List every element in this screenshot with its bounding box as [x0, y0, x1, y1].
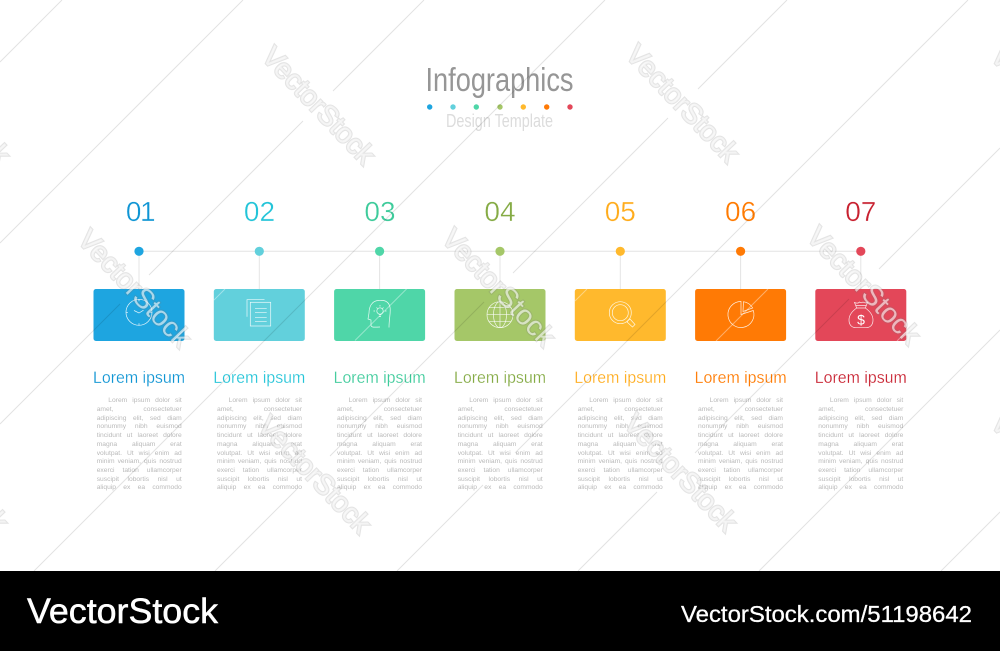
body text 01: nonummy nibh euismod — [97, 423, 182, 430]
body text 02: minim veniam, quis nostrud — [217, 458, 302, 465]
body text 01: tincidunt ut laoreet dolore — [97, 432, 182, 439]
card 03 — [334, 289, 425, 341]
body text 04: amet, consectetuer — [458, 406, 543, 413]
body text 07: tincidunt ut laoreet dolore — [818, 432, 903, 439]
footer band — [0, 571, 1000, 651]
title: Infographics — [426, 61, 574, 98]
panel: step 03 — [334, 196, 427, 497]
timeline line — [139, 250, 860, 252]
body text 03: magna aliquam erat — [337, 441, 422, 448]
panel: step 05 — [574, 196, 668, 497]
number 05: 05 — [605, 196, 636, 227]
heading 07: Lorem ipsum — [815, 369, 907, 387]
icon: clock — [126, 299, 152, 325]
node and connector 02 — [255, 247, 264, 289]
watermark: repeated VectorStock marks: VectorStock — [436, 222, 562, 353]
body text 06 — [698, 397, 788, 497]
body text 07: minim veniam, quis nostrud — [818, 458, 903, 465]
body text 02: volutpat. Ut wisi enim ad — [217, 450, 302, 456]
body text 05: Lorem ipsum dolor sit — [589, 397, 663, 404]
watermark: repeated VectorStock marks: VectorStock — [72, 223, 198, 354]
body text 02: tincidunt ut laoreet dolore — [217, 432, 302, 439]
body text 01 — [97, 397, 187, 497]
card 01 — [94, 289, 184, 341]
body text 03: minim veniam, quis nostrud — [337, 458, 422, 465]
body text 04: adipiscing elit, sed diam — [458, 415, 543, 422]
footer image id: VectorStock.com/51198642 — [681, 601, 972, 627]
panel: step 07 — [815, 196, 908, 497]
body text 07: exerci tation ullamcorper — [818, 467, 903, 474]
heading 03: Lorem ipsum — [334, 369, 426, 387]
body text 04: exerci tation ullamcorper — [458, 467, 543, 474]
body text 01: minim veniam, quis nostrud — [97, 458, 182, 465]
body text 07: suscipit lobortis nisl ut — [818, 476, 903, 483]
watermark: repeated VectorStock marks: VectorStock — [252, 409, 378, 540]
body text 04: nonummy nibh euismod — [458, 423, 543, 430]
body text 01: aliquip ex ea commodo — [97, 484, 182, 491]
body text 06: minim veniam, quis nostrud — [698, 458, 783, 465]
heading 02: Lorem ipsum — [213, 369, 305, 387]
body text 04: suscipit lobortis nisl ut — [458, 476, 543, 483]
body text 05: adipiscing elit, sed diam — [578, 415, 663, 422]
number 03: 03 — [364, 196, 396, 227]
body text 05: suscipit lobortis nisl ut — [578, 476, 663, 483]
body text 05: exerci tation ullamcorper — [578, 467, 663, 474]
card 04 — [454, 289, 546, 341]
body text 06: tincidunt ut laoreet dolore — [698, 432, 783, 439]
body text 02: amet, consectetuer — [217, 406, 302, 413]
body text 02: suscipit lobortis nisl ut — [217, 476, 302, 483]
body text 02 — [217, 397, 307, 497]
body text 01: amet, consectetuer — [97, 406, 182, 413]
body text 03: tincidunt ut laoreet dolore — [337, 432, 422, 439]
watermark: repeated VectorStock marks — [0, 38, 1000, 540]
body text 06: suscipit lobortis nisl ut — [698, 476, 783, 483]
icon: globe — [487, 302, 513, 328]
icon: documents — [247, 300, 271, 326]
body text 04: minim veniam, quis nostrud — [458, 458, 543, 465]
body text 05: nonummy nibh euismod — [578, 423, 663, 430]
panel: step 06 — [695, 196, 788, 497]
icon: money bag: $ — [857, 312, 865, 328]
node and connector 06 — [736, 247, 745, 289]
body text 04: magna aliquam erat — [458, 441, 543, 448]
body text 07: aliquip ex ea commodo — [818, 484, 903, 491]
heading 06: Lorem ipsum — [695, 369, 787, 387]
number 07: 07 — [845, 196, 876, 227]
body text 05: magna aliquam erat — [578, 441, 663, 448]
body text 05: amet, consectetuer — [578, 406, 663, 413]
body text 04: tincidunt ut laoreet dolore — [458, 432, 543, 439]
watermark: repeated VectorStock marks: VectorStock — [256, 40, 382, 171]
number 06: 06 — [725, 196, 756, 227]
body text 05: volutpat. Ut wisi enim ad — [578, 450, 663, 456]
icon: head with lightbulb — [368, 300, 390, 328]
body text 05: minim veniam, quis nostrud — [578, 458, 663, 465]
body text 06: adipiscing elit, sed diam — [698, 415, 783, 422]
body text 02: exerci tation ullamcorper — [217, 467, 302, 474]
card 02 — [214, 289, 305, 341]
body text 02: adipiscing elit, sed diam — [217, 415, 302, 422]
node and connector 04 — [495, 247, 505, 289]
body text 01: exerci tation ullamcorper — [97, 467, 182, 474]
watermark: repeated VectorStock marks: VectorStock — [620, 38, 746, 169]
body text 02: nonummy nibh euismod — [217, 423, 302, 430]
watermark: repeated VectorStock marks: VectorStock — [801, 220, 927, 351]
body text 03: amet, consectetuer — [337, 406, 422, 413]
number 04: 04 — [484, 196, 516, 227]
body text 02: Lorem ipsum dolor sit — [229, 397, 302, 404]
card 07 — [815, 289, 906, 341]
body text 06: Lorem ipsum dolor sit — [710, 397, 783, 404]
panel: step 02 — [213, 196, 307, 497]
heading 05: Lorem ipsum — [574, 369, 666, 387]
body text 01: adipiscing elit, sed diam — [97, 415, 182, 422]
body text 03: Lorem ipsum dolor sit — [349, 397, 422, 404]
subtitle: Design Template — [446, 111, 553, 131]
title dots — [427, 104, 573, 110]
node and connector 03 — [375, 247, 384, 289]
body text 06: aliquip ex ea commodo — [698, 484, 783, 491]
body text 04 — [458, 397, 548, 497]
body text 02: aliquip ex ea commodo — [217, 484, 302, 491]
body text 04: volutpat. Ut wisi enim ad — [458, 450, 543, 456]
heading 04: Lorem ipsum — [454, 369, 546, 387]
card 06 — [695, 289, 786, 341]
node and connector 01 — [134, 247, 144, 289]
body text 04: aliquip ex ea commodo — [458, 484, 543, 491]
card 05 — [575, 289, 666, 341]
body text 07: magna aliquam erat — [818, 441, 903, 448]
body text 06: magna aliquam erat — [698, 441, 783, 448]
body text 06: amet, consectetuer — [698, 406, 783, 413]
body text 01: volutpat. Ut wisi enim ad — [97, 450, 182, 456]
icon: money bag — [849, 302, 873, 328]
body text 07: Lorem ipsum dolor sit — [830, 397, 903, 404]
body text 07 — [818, 397, 908, 497]
icon: magnifier — [609, 302, 635, 327]
body text 03: suscipit lobortis nisl ut — [337, 476, 422, 483]
icon: pie chart — [728, 301, 754, 327]
node and connector 05 — [616, 247, 625, 289]
body text 07: nonummy nibh euismod — [818, 423, 903, 430]
body text 03: nonummy nibh euismod — [337, 423, 422, 430]
body text 05: tincidunt ut laoreet dolore — [578, 432, 663, 439]
body text 07: volutpat. Ut wisi enim ad — [818, 450, 903, 456]
body text 07: adipiscing elit, sed diam — [818, 415, 903, 422]
body text 03: adipiscing elit, sed diam — [337, 415, 422, 422]
body text 06: volutpat. Ut wisi enim ad — [698, 450, 783, 456]
watermark: repeated VectorStock marks: VectorStock — [618, 407, 744, 538]
body text 03: volutpat. Ut wisi enim ad — [337, 450, 422, 456]
body text 06: nonummy nibh euismod — [698, 423, 783, 430]
body text 02: magna aliquam erat — [217, 441, 302, 448]
body text 06: exerci tation ullamcorper — [698, 467, 783, 474]
body text 03 — [337, 397, 427, 497]
body text 01: Lorem ipsum dolor sit — [108, 397, 182, 404]
number 01: 01 — [126, 196, 155, 227]
body text 07: amet, consectetuer — [818, 406, 903, 413]
number 02: 02 — [244, 196, 275, 227]
body text 05 — [578, 397, 668, 497]
body text 03: aliquip ex ea commodo — [337, 484, 422, 491]
body text 01: suscipit lobortis nisl ut — [97, 476, 182, 483]
body text 01: magna aliquam erat — [97, 441, 182, 448]
footer brand: VectorStock — [27, 592, 219, 631]
body text 03: exerci tation ullamcorper — [337, 467, 422, 474]
node and connector 07 — [856, 247, 865, 289]
panel: step 01 — [93, 196, 187, 497]
body text 04: Lorem ipsum dolor sit — [469, 397, 543, 404]
panel: step 04 — [454, 196, 548, 497]
heading 01: Lorem ipsum — [93, 369, 185, 387]
body text 05: aliquip ex ea commodo — [578, 484, 663, 491]
